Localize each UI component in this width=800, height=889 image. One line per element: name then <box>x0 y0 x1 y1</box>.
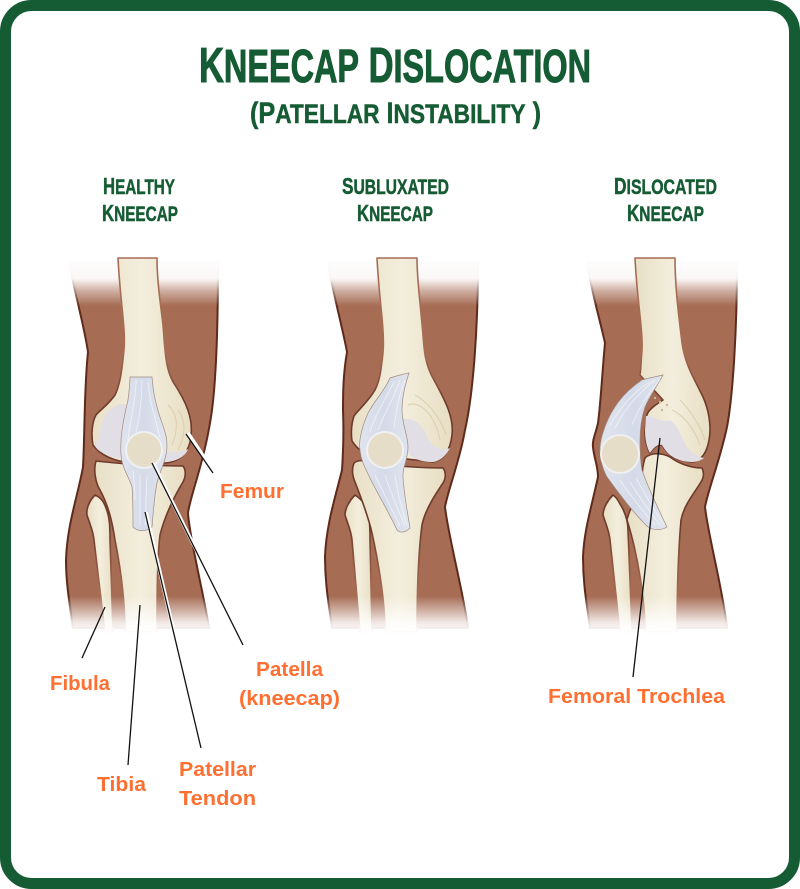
label: patella (kneecap) <box>239 659 340 710</box>
heading: healthy kneecap: KNEECAP <box>102 200 178 226</box>
illustration: healthy knee <box>60 256 225 634</box>
label: patellar tendon: Tendon <box>179 788 256 810</box>
label: tibia: Tibia <box>97 774 147 796</box>
heading: subluxated kneecap: KNEECAP <box>357 200 433 226</box>
heading: dislocated kneecap: DISLOCATED <box>614 173 717 199</box>
heading: dislocated kneecap <box>614 173 717 226</box>
heading: healthy kneecap: HEALTHY <box>103 173 175 199</box>
label: patella (kneecap): (kneecap) <box>239 688 340 710</box>
illustration: subluxated knee <box>320 256 485 634</box>
title: KNEECAP DISLOCATION <box>199 39 591 93</box>
leader lines <box>82 433 660 765</box>
label: patellar tendon <box>179 759 256 810</box>
heading: healthy kneecap <box>102 173 178 226</box>
label: patellar tendon: Patellar <box>179 759 256 781</box>
label: fibula: Fibula <box>50 673 111 695</box>
label: femur: Femur <box>220 481 284 503</box>
subtitle: (PATELLAR INSTABILITY ) <box>250 97 541 130</box>
label: femoral trochlea: Femoral Trochlea <box>548 686 726 708</box>
heading: dislocated kneecap: KNEECAP <box>627 200 704 226</box>
heading: subluxated kneecap <box>342 173 449 226</box>
illustration: dislocated knee <box>578 256 745 634</box>
label: patella (kneecap): Patella <box>256 659 324 681</box>
heading: subluxated kneecap: SUBLUXATED <box>342 173 449 199</box>
